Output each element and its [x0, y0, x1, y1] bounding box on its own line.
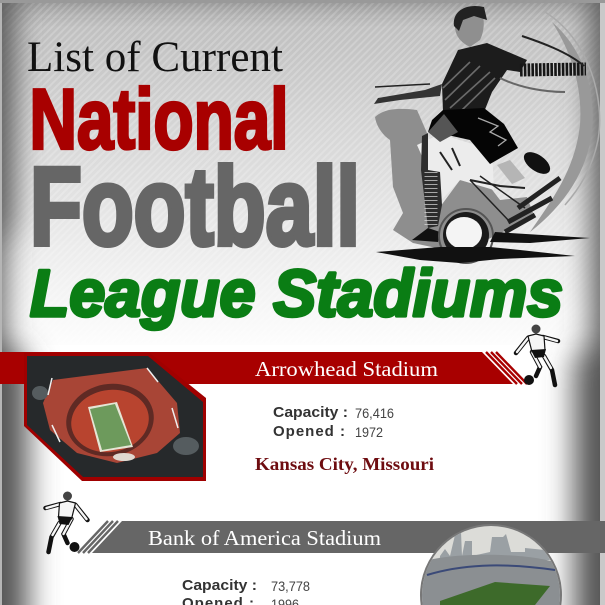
right arm: [520, 69, 586, 70]
boot: [412, 228, 440, 242]
shirt: [442, 43, 527, 112]
ground strokes: [376, 232, 590, 263]
title: [27, 34, 563, 330]
icon: small footballer: [516, 324, 558, 385]
title line: List of Current: List of Current: [27, 34, 283, 81]
shorts shading: [428, 114, 458, 142]
icon: small footballer: [46, 492, 88, 552]
panel: Bank of America Stadium: [46, 492, 605, 605]
motion strokes: [440, 36, 584, 232]
band stripes: [486, 352, 527, 384]
stadium details: Capacity :: [182, 577, 257, 594]
ball: [443, 212, 489, 258]
title line: League Stadiums: League Stadiums: [30, 256, 563, 330]
standing leg: [421, 133, 442, 228]
stadium details: Capacity :: [273, 404, 348, 421]
stadium details: 1972: [355, 424, 383, 440]
shirt hatching: [443, 62, 495, 110]
head: [455, 10, 484, 47]
location: Kansas City, Missouri: [255, 454, 434, 474]
photo: aerial view of stadium: [24, 356, 206, 481]
kicking leg and foot: [497, 160, 525, 184]
photo: round stadium view: [418, 524, 565, 605]
stadium details: [273, 404, 394, 440]
stadium details: [182, 577, 310, 605]
light leg highlight: [417, 134, 494, 204]
title line: Football: Football: [30, 146, 360, 268]
gray title band: [92, 521, 605, 553]
stadium details: Opened :: [273, 423, 345, 440]
swirl crescent: [530, 22, 593, 232]
left arm: [374, 84, 442, 104]
title line: National: National: [30, 72, 288, 168]
red title band: [0, 352, 513, 384]
thin swirl arcs: [545, 12, 600, 205]
stadium details: 76,416: [355, 405, 394, 421]
illustration: football player kicking ball: [374, 6, 600, 263]
stadium name: Bank of America Stadium: [148, 526, 381, 550]
shorts: [428, 108, 518, 164]
band stripes: [78, 521, 118, 553]
gray shadow splash: [375, 109, 533, 253]
stadium name: Arrowhead Stadium: [255, 357, 438, 381]
panel: Arrowhead Stadium: [0, 324, 558, 485]
stadium details: 73,778: [271, 578, 310, 594]
